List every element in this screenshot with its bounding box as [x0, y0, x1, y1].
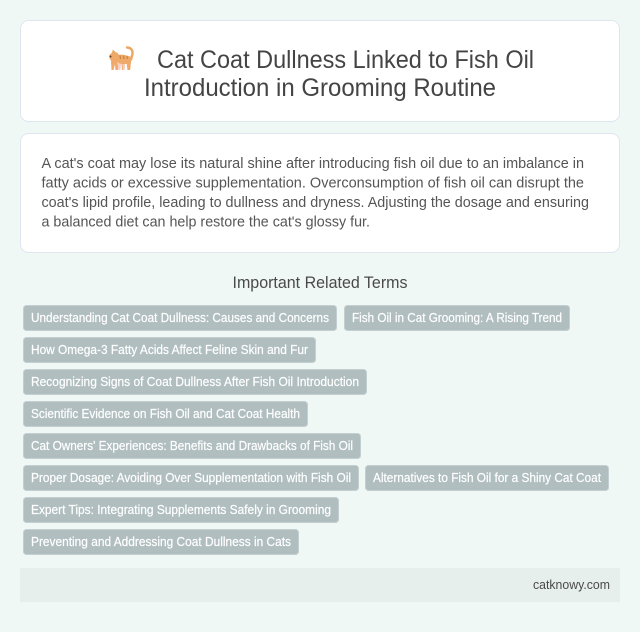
description text: fatty acids or excessive supplementation. Overconsumption of fish oil can disrupt the: [42, 174, 584, 192]
tag: recognizing signs: Recognizing Signs of Coat Dullness After Fish Oil Introduction: [31, 375, 359, 389]
title text: [144, 46, 534, 102]
tag: expert tips: [24, 498, 338, 522]
title text: Cat Coat Dullness Linked to Fish Oil: [157, 46, 534, 74]
tag: owners: [24, 434, 360, 458]
description text: coat's lipid profile, leading to dullness and dryness. Adjusting the dosage and ensuring: [42, 194, 589, 211]
tag: proper dosage: [24, 466, 358, 490]
tag: preventing: [24, 530, 298, 554]
tag: owners: Cat Owners' Experiences: Benefits and Drawbacks of Fish Oil: [31, 439, 353, 453]
tag: fish oil trend: Fish Oil in Cat Grooming: A Rising Trend: [352, 311, 562, 325]
tag: recognizing signs: [24, 370, 366, 394]
title card: [20, 20, 620, 122]
tag: alternatives: [366, 466, 608, 490]
tag: proper dosage: Proper Dosage: Avoiding Over Supplementation with Fish Oil: [31, 471, 351, 485]
footer: catknowy.com: [533, 577, 610, 592]
tag: preventing: Preventing and Addressing Coat Dullness in Cats: [31, 535, 291, 549]
tag: scientific evidence: [24, 402, 308, 426]
description text: a balanced diet can help restore the cat's glossy fur.: [42, 214, 370, 230]
tag: fish oil trend: [344, 306, 570, 330]
tag: omega-3: [24, 338, 316, 362]
tag: alternatives: Alternatives to Fish Oil for a Shiny Cat Coat: [373, 471, 601, 485]
tag: understanding: Understanding Cat Coat Dullness: Causes and Concerns: [31, 311, 329, 325]
panel: description: [20, 134, 620, 252]
tag: expert tips: Expert Tips: Integrating Supplements Safely in Grooming: [31, 503, 331, 517]
description text: A cat's coat may lose its natural shine after introducing fish oil due to an imbalance in: [42, 155, 584, 172]
description text: [42, 155, 589, 230]
tags list: [24, 306, 608, 554]
footer: [20, 568, 620, 602]
heading: important related terms: Important Related Terms: [232, 273, 408, 292]
tag: understanding: [24, 306, 336, 330]
tag: scientific evidence: Scientific Evidence on Fish Oil and Cat Coat Health: [31, 407, 300, 421]
icon: cat: [109, 48, 133, 70]
title text: Introduction in Grooming Routine: [144, 74, 496, 102]
tag: omega-3: How Omega-3 Fatty Acids Affect Feline Skin and Fur: [31, 343, 308, 357]
